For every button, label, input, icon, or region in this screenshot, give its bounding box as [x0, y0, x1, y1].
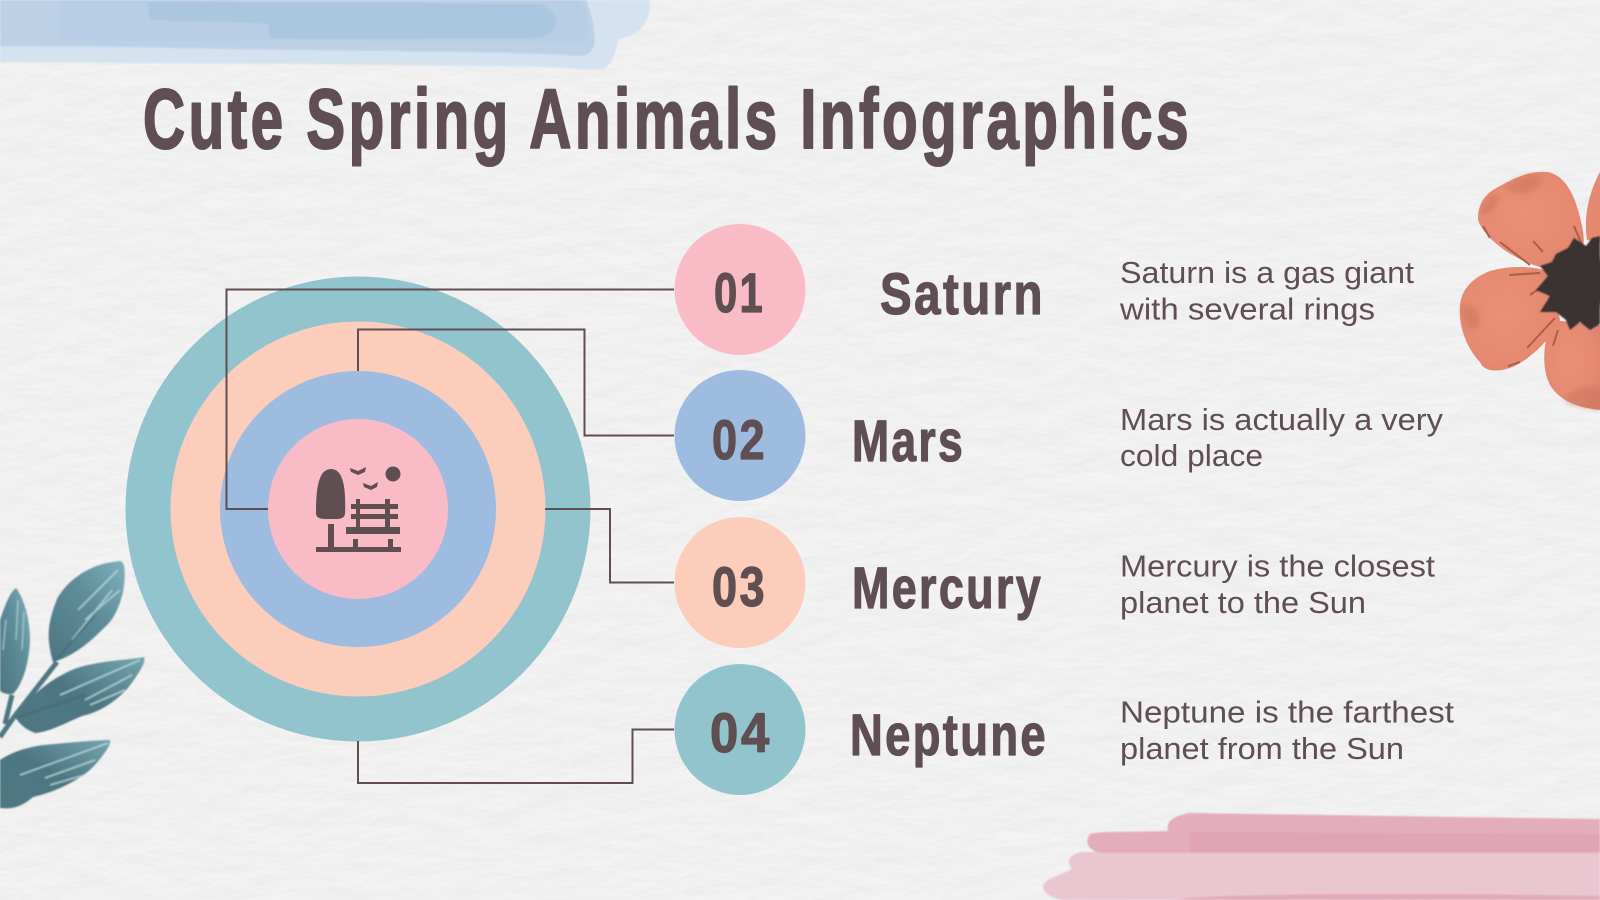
leaf: bottom: [0, 740, 110, 808]
description: Neptune: Neptune is the farthest: [1120, 694, 1454, 730]
decoration: leaves: [0, 561, 144, 808]
brush stroke: pink bottom-right: [1043, 813, 1600, 900]
badge 02: 02: [712, 408, 767, 471]
description: Saturn: Saturn is a gas giant: [1120, 255, 1414, 290]
badge 03: [674, 517, 806, 648]
ring: centre pink: [268, 419, 448, 599]
leaf: upper left: [0, 588, 30, 694]
leaf: middle: [15, 657, 144, 733]
description: Mercury: Mercury is the closest: [1120, 548, 1435, 584]
petal veins: [1483, 226, 1582, 366]
row 02: Mars: [674, 370, 1444, 501]
badge 04: 04: [710, 701, 772, 764]
heading: Neptune: Neptune: [850, 703, 1048, 768]
row 01: Saturn: [674, 224, 1414, 355]
badge 03: 03: [712, 555, 767, 618]
description: Saturn: with several rings: [1119, 292, 1375, 326]
ring: outer teal: [126, 276, 590, 742]
decoration: flower: [1460, 172, 1600, 410]
petal: bottom: [1544, 320, 1600, 410]
badge 04: [674, 664, 806, 795]
leaf: top: [49, 561, 125, 662]
heading: Mercury: Mercury: [852, 556, 1043, 621]
stem: [0, 662, 57, 737]
petal shading: [1461, 175, 1600, 410]
flower centre: [1536, 236, 1600, 330]
badge 02: [674, 370, 806, 501]
badge 01: [674, 224, 806, 355]
petal: left: [1460, 267, 1560, 370]
badge 01: 01: [714, 261, 765, 324]
heading: Saturn: Saturn: [880, 262, 1045, 327]
connector lines: [226, 290, 674, 783]
brush stroke: blue top-left: [0, 0, 650, 70]
connector: 02: [358, 330, 674, 436]
description: Mars: Mars is actually a very: [1120, 402, 1444, 437]
connector: 04: [358, 730, 674, 783]
description: Mercury: planet to the Sun: [1120, 585, 1366, 620]
concentric circle diagram: [126, 276, 590, 742]
ring: blue: [220, 371, 496, 647]
connector: 01: [226, 290, 674, 509]
heading: Mars: Mars: [852, 409, 965, 474]
row 04: Neptune: [674, 664, 1454, 795]
ring: peach: [170, 322, 546, 696]
description: Mars: cold place: [1120, 438, 1263, 473]
row 03: Mercury: [674, 517, 1435, 648]
petal: top right: [1586, 172, 1600, 242]
description: Neptune: planet from the Sun: [1120, 731, 1404, 766]
icon: park bench with tree: [316, 466, 401, 552]
connector: 03: [545, 509, 674, 582]
petal: upper: [1478, 172, 1584, 267]
